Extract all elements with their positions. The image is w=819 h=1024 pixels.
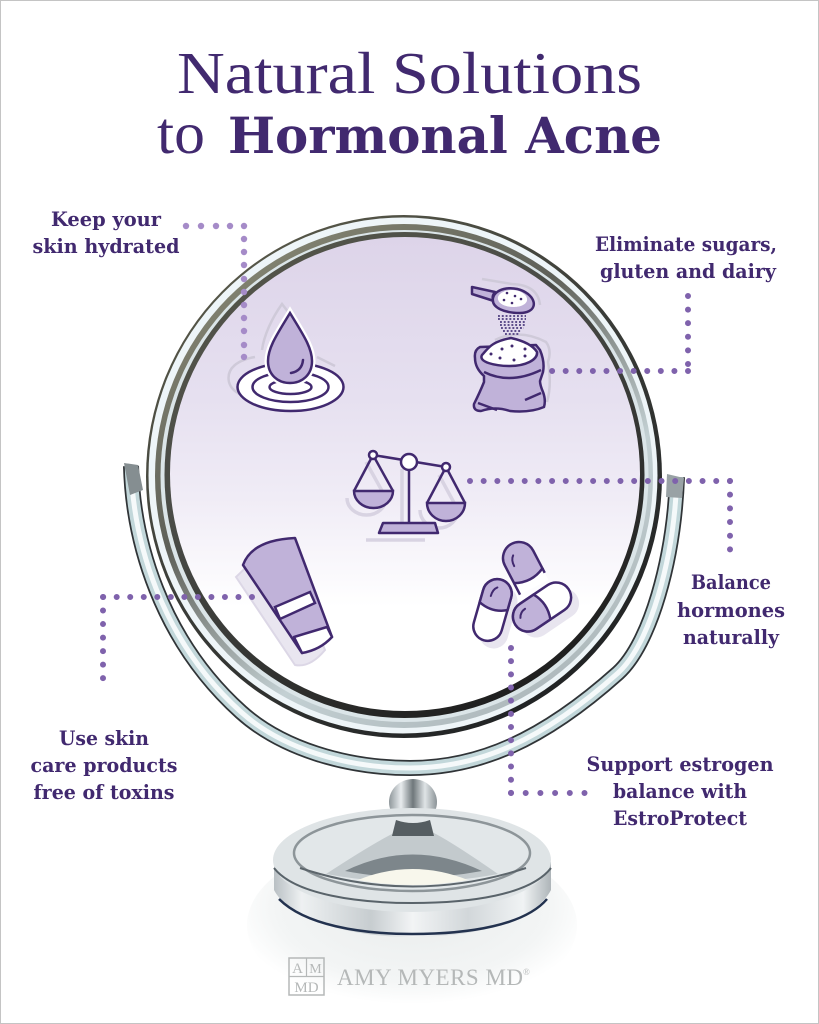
icon: balance scale [347, 451, 465, 540]
scale shadow [347, 462, 458, 540]
label: skin care products: free of toxins [34, 780, 174, 804]
label: estrogen balance: balance with [613, 779, 747, 803]
dotted connector: hormones [470, 481, 730, 563]
label: eliminate sugars: Eliminate sugars, [595, 232, 777, 256]
label: skin care products: care products [30, 753, 178, 777]
label: skin care products: Use skin [59, 726, 149, 750]
label: eliminate sugars: gluten and dairy [600, 259, 777, 283]
dotted connector: sugars [552, 296, 688, 371]
logo: Amy Myers MD: A [292, 961, 303, 977]
dotted connector: estrogen [511, 648, 585, 793]
label: keep skin hydrated [32, 207, 180, 258]
icon: capsules [470, 536, 585, 652]
label: estrogen balance [586, 752, 774, 830]
title: to [157, 100, 205, 166]
label: estrogen balance: EstroProtect [613, 806, 748, 830]
icon: water drop [229, 304, 344, 411]
left pivot bolt [124, 463, 143, 495]
icon: spoon and sack of flour [472, 279, 550, 412]
title: Hormonal Acne [228, 106, 662, 165]
logo: Amy Myers MD [289, 958, 530, 996]
mirror frame [146, 215, 662, 738]
label: balance hormones: hormones [677, 598, 785, 622]
capsule shadows [476, 583, 585, 652]
mirror glass [170, 237, 640, 711]
dotted connector: hydrated [183, 223, 247, 360]
base side [274, 862, 551, 937]
ball collar [392, 820, 434, 836]
icon: skin care tube [236, 538, 332, 665]
label: eliminate sugars [595, 232, 777, 283]
logo: Amy Myers MD: MD [294, 980, 319, 996]
swivel cradle arm [131, 466, 677, 768]
logo: Amy Myers MD: AMY MYERS MD [337, 965, 523, 990]
spoon [472, 287, 534, 313]
label: balance hormones: naturally [683, 625, 780, 649]
left capsule [470, 576, 515, 644]
logo: Amy Myers MD: M [309, 962, 322, 977]
label: keep skin hydrated: Keep your [51, 207, 161, 231]
sack [474, 345, 545, 412]
title [157, 40, 662, 166]
dotted connector: skin care [103, 597, 252, 686]
label: balance hormones: Balance [691, 570, 771, 594]
label: skin care products [30, 726, 178, 804]
mirror stand [124, 463, 684, 937]
right pivot bolt [666, 474, 684, 498]
label: keep skin hydrated: skin hydrated [32, 234, 180, 258]
top capsule [497, 536, 548, 595]
base top [273, 808, 551, 912]
label: balance hormones [677, 570, 785, 649]
mirror base reflection shadow [247, 837, 577, 1013]
right capsule [507, 577, 577, 637]
label: estrogen balance: Support estrogen [586, 752, 774, 776]
falling powder [498, 316, 526, 334]
logo: Amy Myers MD: ® [523, 967, 530, 977]
neck ball [389, 779, 437, 825]
title: Natural Solutions [177, 40, 642, 106]
